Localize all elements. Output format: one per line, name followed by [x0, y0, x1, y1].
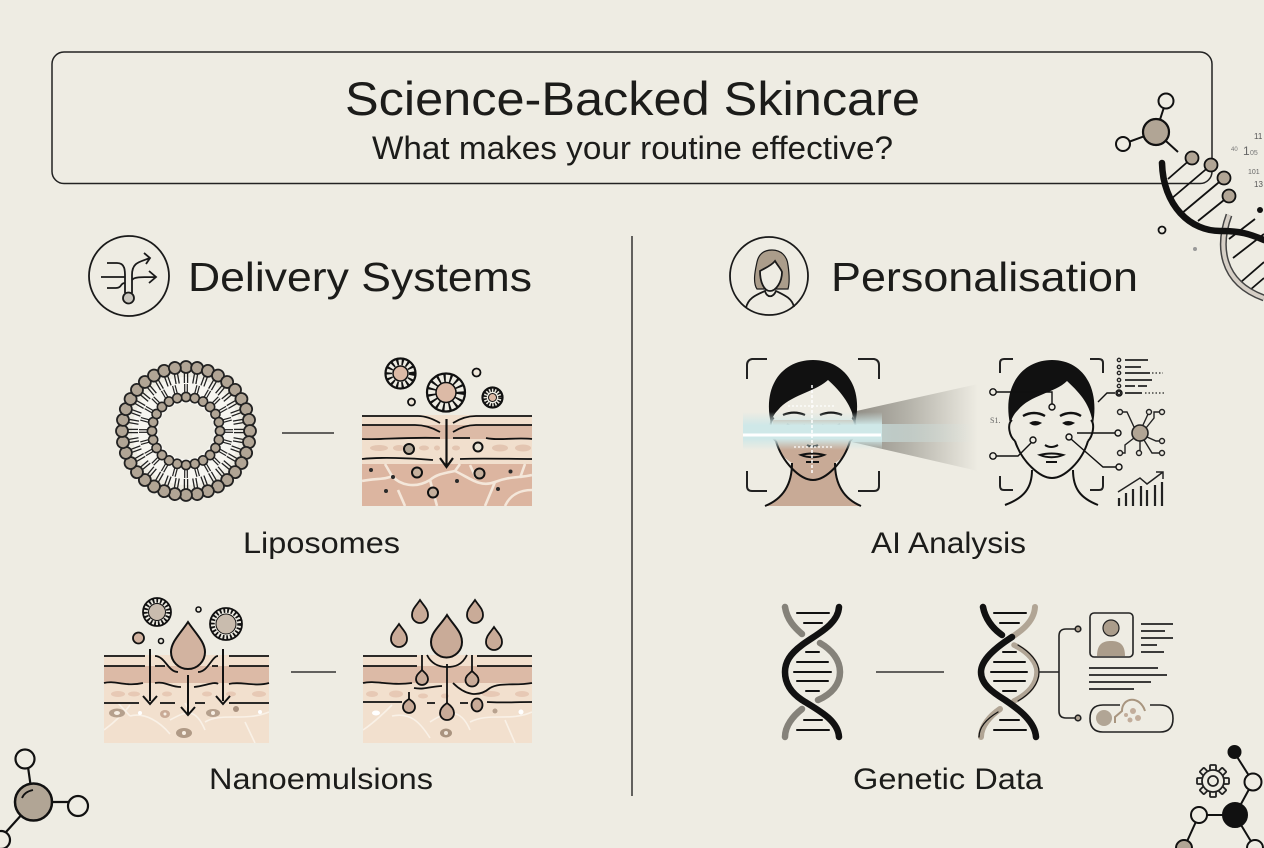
carrier particles: [133, 598, 242, 644]
liposome particles: [386, 358, 502, 412]
profile card: [1090, 613, 1133, 657]
label: AI analysis: AI Analysis: [871, 527, 1026, 560]
decoration: binary numbers: [1231, 132, 1263, 189]
DNA helix: plain: [785, 607, 840, 737]
decoration: binary numbers: 101: [1248, 169, 1260, 176]
profile data tree: [1039, 613, 1173, 732]
label: nanoemulsions: Nanoemulsions: [209, 763, 433, 796]
decoration: binary numbers: 1: [1243, 144, 1250, 158]
decoration: molecule and gear, bottom right: [1176, 746, 1263, 848]
label: liposomes: Liposomes: [243, 527, 400, 560]
divider: [631, 236, 633, 796]
AI analysis: face being scanned: [743, 359, 882, 506]
droplets: [391, 600, 502, 720]
liposome diagram: [116, 361, 256, 501]
connector: genetic data: [876, 671, 944, 673]
connector: liposomes: [282, 432, 334, 434]
trend chart: [1118, 472, 1163, 506]
decoration: molecule and DNA, top right: [1116, 94, 1264, 298]
icon: gear: [1197, 765, 1229, 797]
subtitle: What makes your routine effective?: [372, 130, 893, 166]
skin cross-section with nanoemulsion arrows: [104, 598, 269, 743]
DNA helix: linked to profile: [979, 607, 1039, 737]
connector: nanoemulsions: [291, 671, 336, 673]
decoration: molecule, bottom left: [0, 750, 88, 848]
skin cross-section with liposomes: [362, 358, 532, 506]
icon: person: [730, 237, 808, 315]
heading: Delivery Systems: [188, 254, 532, 300]
label: genetic data: Genetic Data: [853, 763, 1043, 796]
decoration: binary numbers: 05: [1250, 150, 1258, 157]
nanoemulsion droplet: [171, 622, 205, 669]
icon: branching flow: [89, 236, 169, 316]
section header: personalisation: [730, 237, 1138, 315]
AI analysis: scanning beam: [852, 384, 978, 471]
AI analysis: mapped face: S1.: [990, 416, 1000, 425]
skin cross-section with droplets: [363, 600, 532, 743]
callouts: [990, 389, 1122, 470]
decoration: binary numbers: 13: [1254, 180, 1263, 189]
network icon: [1118, 410, 1164, 456]
scan frame: [1000, 359, 1103, 490]
decoration: binary numbers: 40: [1231, 147, 1238, 153]
scan frame: [747, 359, 879, 491]
heading: Personalisation: [831, 254, 1138, 300]
decoration: binary numbers: 11: [1254, 132, 1263, 141]
genomic record: [1090, 700, 1173, 732]
data list: [1117, 358, 1165, 395]
section header: delivery systems: [89, 236, 532, 316]
AI analysis: mapped face: [990, 359, 1122, 505]
title: Science-Backed Skincare: [345, 72, 920, 125]
title panel: [52, 52, 1212, 184]
